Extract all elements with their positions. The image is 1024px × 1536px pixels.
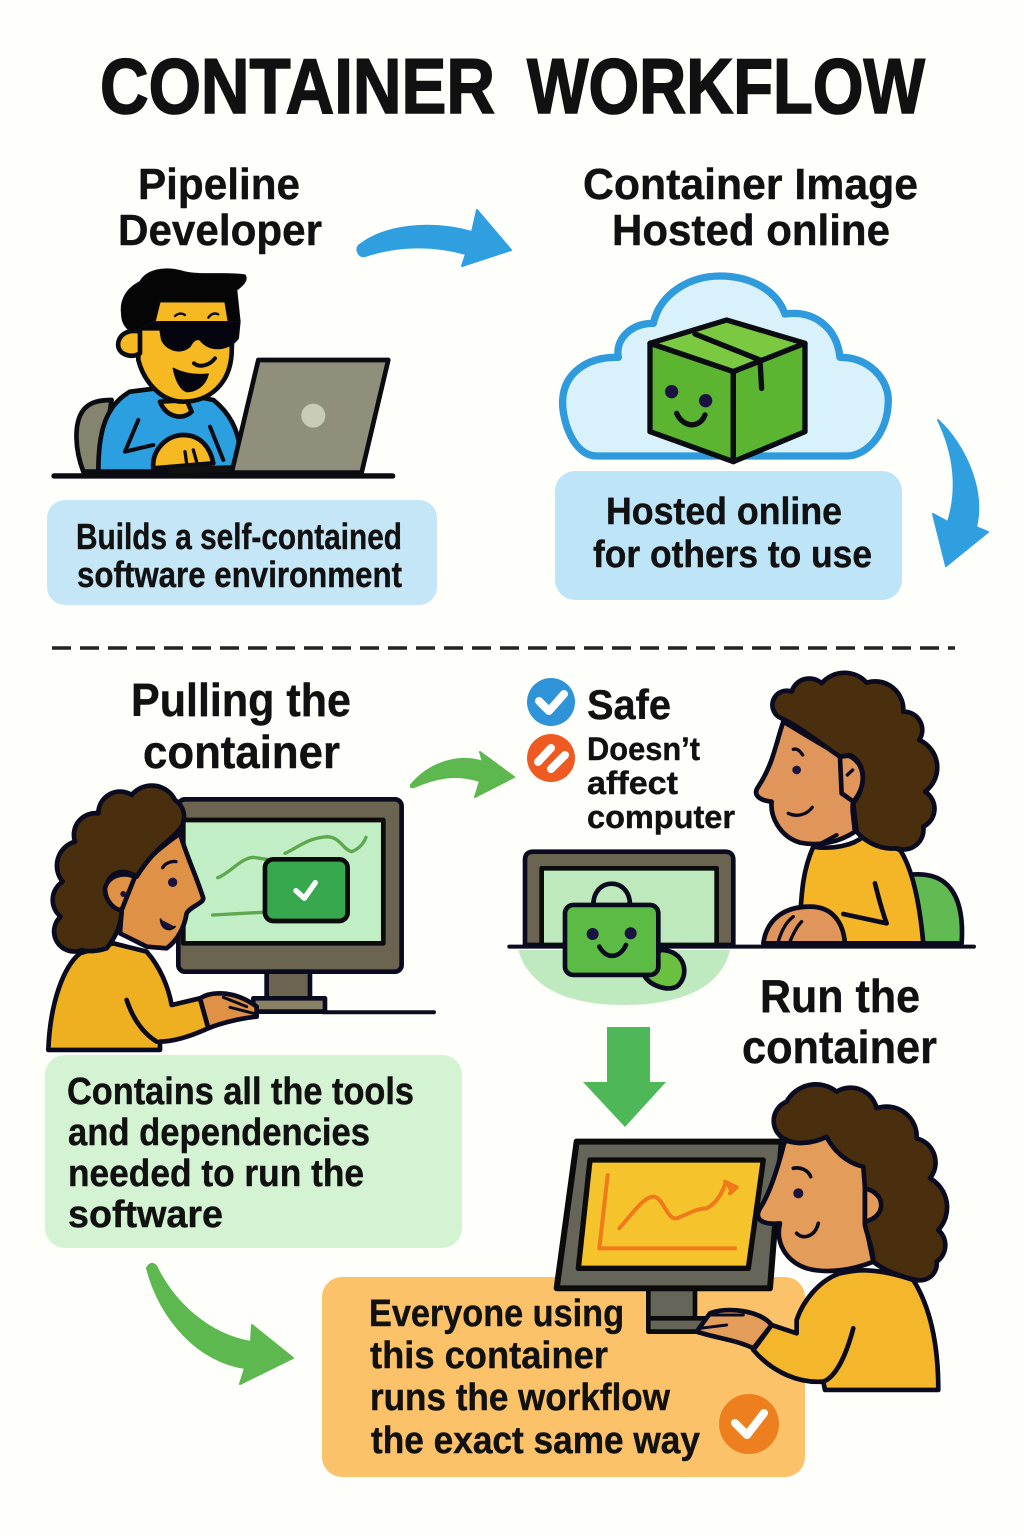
- heading: container image hosted online: [583, 160, 918, 255]
- text box: same way: [322, 1277, 805, 1477]
- title: [100, 42, 925, 130]
- ear inner: [120, 891, 126, 897]
- hair: [53, 786, 184, 951]
- laptop logo: [301, 404, 325, 428]
- text box: contains tools: needed to run the: [68, 1153, 364, 1195]
- heading: pipeline developer: [118, 160, 322, 255]
- text box: builds environment: software environment: [77, 554, 402, 595]
- heading: pulling the container: [131, 674, 351, 778]
- hair: [774, 1084, 947, 1280]
- hair: [121, 269, 246, 332]
- cloud: [563, 276, 888, 456]
- brow: [163, 861, 176, 868]
- box face: [677, 413, 705, 425]
- desk: [323, 1006, 434, 1018]
- mouth: [788, 807, 812, 815]
- ear: [105, 874, 135, 910]
- check panel: [265, 859, 348, 921]
- heading: pulling the container: container: [143, 726, 340, 778]
- label: does not affect computer: computer: [587, 799, 735, 835]
- monitor: [178, 799, 402, 972]
- arrow: down to run: [583, 1027, 666, 1127]
- text box: hosted online: Hosted online: [606, 491, 842, 533]
- box: [650, 320, 805, 462]
- face: [758, 1137, 873, 1271]
- mouth: [173, 368, 208, 392]
- fingers: [223, 997, 253, 1013]
- illustration: developer at laptop: [54, 269, 393, 476]
- tail: [645, 950, 684, 988]
- illustration: woman running the container: [557, 1084, 947, 1390]
- box eyes: [665, 385, 712, 407]
- tape: [695, 334, 762, 388]
- laptop: [232, 360, 388, 473]
- arm line: [843, 883, 887, 923]
- ear: [840, 756, 863, 802]
- eyes: [175, 314, 218, 318]
- hand: [200, 993, 257, 1028]
- chair: [908, 874, 962, 943]
- laptop screen: [542, 868, 717, 945]
- icon: safe check: [527, 678, 575, 726]
- face: [756, 722, 863, 844]
- screen lines: [213, 837, 366, 915]
- arrow: cloud downward: [933, 420, 988, 566]
- body: [98, 388, 240, 472]
- label: does not affect computer: affect: [587, 765, 678, 801]
- text box: same way: this container: [370, 1335, 608, 1377]
- hand: [697, 1310, 772, 1348]
- text box: hosted online: [555, 471, 902, 600]
- label: safe: Safe: [587, 681, 671, 728]
- title: WORKFLOW: [527, 42, 925, 130]
- label: does not affect computer: Doesn’t: [587, 731, 700, 767]
- monitor frame: [557, 1142, 782, 1288]
- chart: [599, 1175, 737, 1248]
- shirt: [798, 837, 923, 943]
- heading: run the container: [742, 970, 937, 1073]
- arm lines: [125, 420, 223, 460]
- head: [138, 300, 233, 402]
- text box: same way: runs the workflow: [370, 1377, 670, 1419]
- shirt: [48, 943, 208, 1050]
- nose: [194, 358, 215, 366]
- arm line: [823, 1328, 853, 1382]
- bag smile: [599, 945, 626, 956]
- arrow: tools to everyone: [147, 1264, 293, 1384]
- ear: [118, 331, 140, 356]
- icon: orange check: [719, 1394, 779, 1454]
- ear inner: [847, 770, 853, 775]
- heading: container image hosted online: Container Image: [583, 160, 918, 209]
- fingers: [700, 1315, 743, 1328]
- heading: container image hosted online: Hosted online: [612, 206, 890, 255]
- fingers: [185, 450, 197, 463]
- heading: pipeline developer: Pipeline: [138, 160, 300, 209]
- chin line: [818, 835, 837, 845]
- ear: [865, 1188, 881, 1222]
- arm line: [127, 1000, 157, 1042]
- monitor screen: [183, 820, 383, 943]
- bag shackle: [593, 884, 630, 905]
- green bowl: [518, 950, 730, 1005]
- heading: pipeline developer: Developer: [118, 206, 322, 255]
- text box: contains tools: Contains all the tools: [67, 1071, 414, 1113]
- illustration: cloud with smiling box: [563, 276, 888, 462]
- bag eyes: [587, 927, 637, 940]
- mouth: [161, 919, 175, 929]
- brow: [793, 749, 803, 755]
- illustration: woman with safe container: [509, 673, 974, 1005]
- text box: builds environment: [47, 500, 437, 605]
- check mark: [296, 883, 315, 898]
- chair: [76, 400, 112, 472]
- heading: pulling the container: Pulling the: [131, 674, 351, 726]
- title: CONTAINER: [100, 42, 495, 130]
- shirt: [753, 1270, 938, 1390]
- bag: [565, 905, 658, 975]
- sunglasses: [137, 322, 240, 351]
- illustration: woman at monitor pulling container: [48, 786, 434, 1050]
- label: does not affect computer: [587, 731, 735, 835]
- arm hand: [763, 907, 845, 943]
- text box: builds environment: Builds a self-contained: [76, 516, 402, 557]
- hair: [772, 673, 937, 850]
- eye: [792, 766, 801, 774]
- monitor base: [253, 998, 325, 1012]
- laptop base: [172, 468, 233, 471]
- eye: [793, 1188, 803, 1198]
- heading: run the container: container: [742, 1021, 937, 1073]
- text box: same way: Everyone using: [369, 1293, 624, 1335]
- monitor stand: [648, 1288, 695, 1320]
- monitor screen: [578, 1160, 763, 1268]
- arrow: pulling to safe: [411, 752, 514, 797]
- brow: [793, 1168, 811, 1177]
- desk: [509, 941, 974, 953]
- mouth: [797, 1223, 818, 1237]
- text box: contains tools: software: [68, 1194, 223, 1236]
- arrow: developer to container image: [357, 210, 511, 266]
- eye: [168, 878, 177, 887]
- icon: no entry: [527, 734, 575, 782]
- text box: same way: the exact same way: [371, 1420, 700, 1462]
- text box: hosted online: for others to use: [593, 534, 872, 576]
- text box: contains tools: and dependencies: [68, 1112, 370, 1154]
- laptop frame: [525, 852, 733, 945]
- text box: contains tools: [45, 1055, 462, 1248]
- fingers: [778, 917, 802, 942]
- desk: [54, 468, 393, 484]
- hand: [153, 435, 213, 468]
- collar: [160, 400, 192, 417]
- face: [105, 833, 203, 948]
- heading: run the container: Run the: [760, 970, 920, 1022]
- monitor base: [648, 1318, 713, 1332]
- monitor stand: [267, 972, 310, 998]
